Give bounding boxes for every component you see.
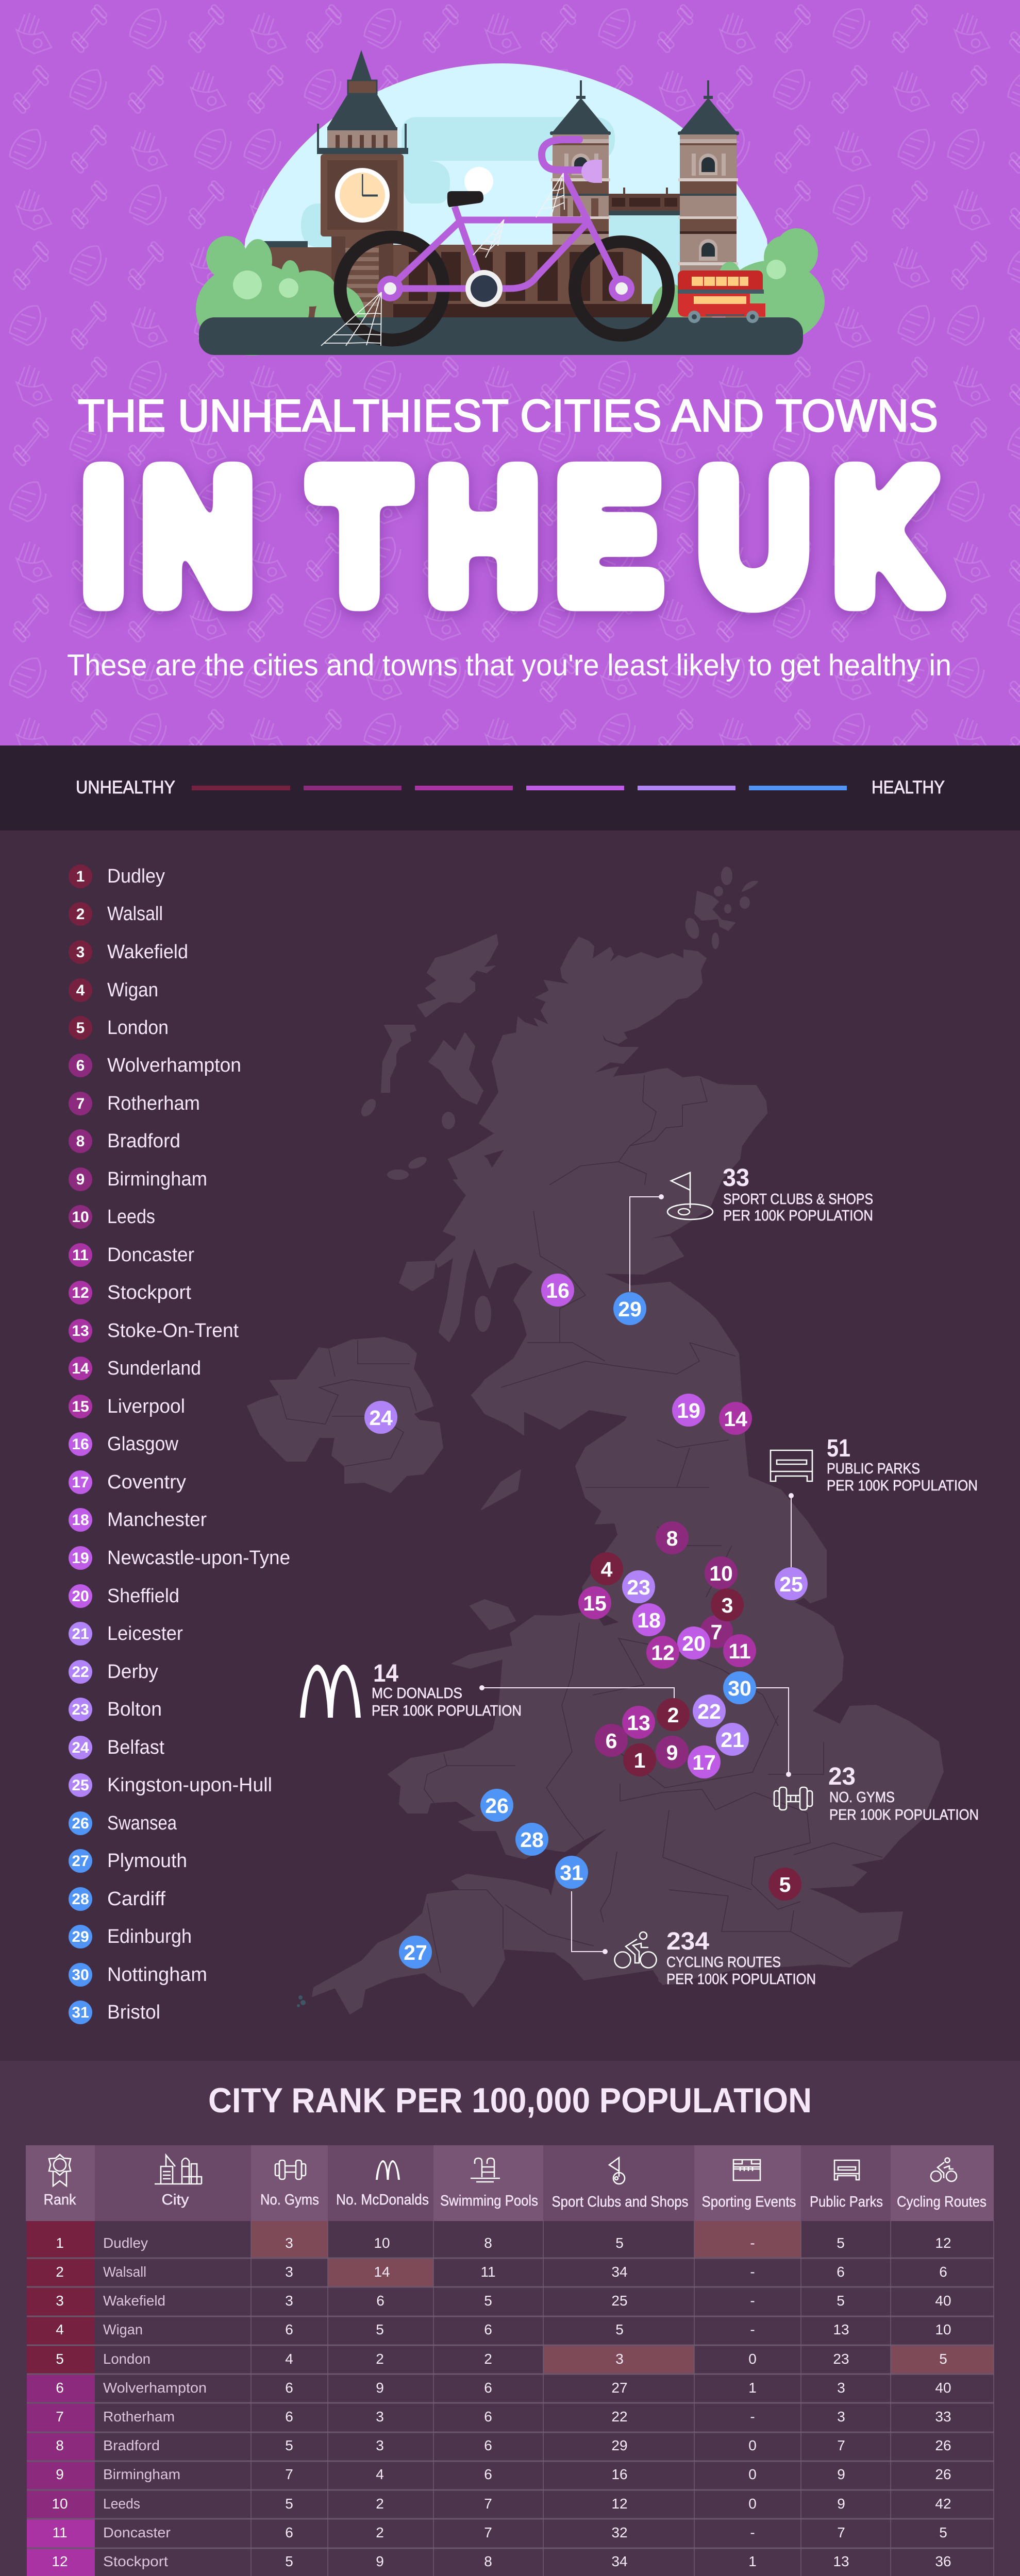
map markers: city ranks: 10 <box>709 1562 733 1585</box>
table rows: 4 <box>56 2321 64 2337</box>
table rows: 0 <box>748 2466 757 2482</box>
table rows: 11 <box>480 2264 496 2280</box>
table header <box>26 2145 994 2221</box>
list: ranked cities: 7 <box>76 1095 85 1112</box>
list: ranked cities: Bradford <box>107 1130 180 1152</box>
list: ranked cities: Stockport <box>107 1282 191 1303</box>
table rows: London <box>103 2351 151 2367</box>
title: the unhealthiest cities and towns: THE UNHEALTHIEST CITIES AND TOWNS <box>78 390 938 441</box>
table rows: Birmingham <box>103 2466 180 2482</box>
table rows: 2 <box>376 2524 384 2540</box>
header icon: cyclist <box>931 2158 957 2181</box>
table rows: 26 <box>935 2466 951 2482</box>
table header: City <box>162 2192 189 2208</box>
map markers: city ranks: 7 <box>711 1620 722 1644</box>
list: ranked cities: Derby <box>107 1661 158 1683</box>
table rows: 6 <box>285 2321 293 2337</box>
table rows: 3 <box>285 2293 293 2309</box>
table header: Rank <box>43 2192 76 2208</box>
table rows: 8 <box>484 2235 492 2251</box>
table rows: Walsall <box>103 2264 146 2280</box>
table rows: 26 <box>935 2437 951 2453</box>
table rows: 3 <box>376 2437 384 2453</box>
table rows: Doncaster <box>103 2524 171 2540</box>
list: ranked cities: 15 <box>72 1398 89 1415</box>
table rows: 40 <box>935 2293 951 2309</box>
list: ranked cities: Swansea <box>107 1812 177 1834</box>
list: ranked cities: Nottingham <box>107 1964 207 1986</box>
table rows: 6 <box>285 2380 293 2396</box>
table rows: - <box>750 2293 755 2309</box>
map markers: city ranks: 1 <box>634 1749 645 1772</box>
map: United Kingdom and Ireland <box>247 867 943 2014</box>
list: ranked cities: 28 <box>72 1891 89 1908</box>
list: ranked cities: Rotherham <box>107 1093 200 1114</box>
table rows: 6 <box>484 2321 492 2337</box>
table rows: 3 <box>837 2409 845 2425</box>
list: ranked cities: London <box>107 1017 169 1039</box>
map markers: city ranks: 5 <box>779 1873 791 1896</box>
table rows: 7 <box>837 2524 845 2540</box>
header icon: city skyline <box>155 2155 202 2184</box>
table rows: 6 <box>837 2264 845 2280</box>
spider webs <box>321 173 564 346</box>
list: ranked cities: 31 <box>72 2004 89 2021</box>
list: ranked cities: 26 <box>72 1815 89 1832</box>
list: ranked cities: Doncaster <box>107 1244 194 1266</box>
header icon: swimming pool <box>471 2158 500 2182</box>
header icon: rank badge <box>49 2155 71 2186</box>
road <box>199 317 803 355</box>
map markers: city ranks: 18 <box>637 1608 661 1632</box>
table rows: 10 <box>374 2235 390 2251</box>
map markers: city ranks: 14 <box>724 1407 747 1431</box>
list: ranked cities: Kingston-upon-Hull <box>107 1774 272 1796</box>
panel: legend band: HEALTHY <box>872 777 945 798</box>
map markers: city ranks: 11 <box>728 1639 751 1663</box>
table rows: Dudley <box>103 2235 148 2251</box>
table rows: 9 <box>376 2553 384 2569</box>
table rows: 7 <box>484 2496 492 2512</box>
list: ranked cities: Cardiff <box>107 1888 165 1910</box>
table rows: 5 <box>285 2496 293 2512</box>
parliament <box>393 245 653 317</box>
panel: legend band: UNHEALTHY <box>76 777 175 798</box>
list: ranked cities: Edinburgh <box>107 1926 192 1947</box>
table rows: 22 <box>611 2409 628 2425</box>
list: ranked cities: 14 <box>72 1360 89 1377</box>
table rows: 34 <box>611 2264 628 2280</box>
table rows: Bradford <box>103 2437 160 2453</box>
list: ranked cities: 20 <box>72 1588 89 1605</box>
table rows: 32 <box>611 2524 628 2540</box>
list: ranked cities: 1 <box>76 868 85 885</box>
list: ranked cities: 9 <box>76 1171 85 1188</box>
table rows: 2 <box>56 2264 64 2280</box>
table header: Sport Clubs and Shops <box>551 2194 689 2210</box>
table rows: 3 <box>837 2380 845 2396</box>
callout: sport clubs and shops: SPORT CLUBS & SHOPS <box>723 1191 873 1208</box>
callout: cycling routes: 234 <box>666 1928 709 1955</box>
table rows: 5 <box>56 2351 64 2367</box>
callout: sport clubs and shops: 33 <box>723 1164 749 1192</box>
table rows: 5 <box>939 2524 947 2540</box>
list: ranked cities: Leicester <box>107 1623 183 1645</box>
map markers: city ranks: 9 <box>666 1741 678 1765</box>
callout: no. gyms: 23 <box>828 1763 856 1790</box>
table rows: 5 <box>837 2293 845 2309</box>
table rows: 13 <box>833 2553 849 2569</box>
list: ranked cities: 27 <box>72 1853 89 1870</box>
table rows: 6 <box>285 2524 293 2540</box>
panel: purple header <box>0 0 1020 745</box>
map markers: city ranks: 6 <box>606 1729 617 1753</box>
table rows: 2 <box>376 2351 384 2367</box>
list: ranked cities: Wigan <box>107 979 158 1001</box>
map markers: city ranks: 31 <box>560 1861 583 1885</box>
table rows: 10 <box>935 2321 951 2337</box>
table rows: 9 <box>837 2466 845 2482</box>
table rows: 3 <box>285 2235 293 2251</box>
table rows: - <box>750 2235 755 2251</box>
table rows: Rotherham <box>103 2409 175 2425</box>
table rows: 6 <box>285 2409 293 2425</box>
list: ranked cities: 29 <box>72 1928 89 1945</box>
header icon: golf <box>609 2158 625 2184</box>
table rows: 25 <box>611 2293 628 2309</box>
callout: sport clubs and shops: PER 100K POPULATION <box>723 1208 873 1224</box>
table rows: 27 <box>611 2380 628 2396</box>
table rows: 7 <box>56 2409 64 2425</box>
list: ranked cities: Manchester <box>107 1509 207 1531</box>
callout: public parks: PUBLIC PARKS <box>827 1461 920 1477</box>
list: ranked cities: Newcastle-upon-Tyne <box>107 1547 290 1569</box>
bicycle <box>340 140 668 340</box>
map markers: city ranks: 16 <box>546 1279 570 1302</box>
header icon: bench <box>834 2160 859 2180</box>
list: ranked cities: 30 <box>72 1967 89 1984</box>
list: ranked cities: 24 <box>72 1739 89 1756</box>
panel: legend band <box>0 745 1020 831</box>
table rows: - <box>750 2524 755 2540</box>
table header: Sporting Events <box>702 2194 796 2210</box>
table header: No. Gyms <box>260 2192 319 2208</box>
table rows: - <box>750 2409 755 2425</box>
list: ranked cities: Leeds <box>107 1206 155 1228</box>
table rows: 5 <box>285 2437 293 2453</box>
list: ranked cities: Liverpool <box>107 1396 185 1417</box>
table rows: 3 <box>376 2409 384 2425</box>
list: ranked cities: Wakefield <box>107 941 188 963</box>
callout: mc donalds: MC DONALDS <box>372 1685 462 1702</box>
header icon: mcdonalds <box>376 2160 400 2180</box>
list: ranked cities: 4 <box>76 982 85 999</box>
table rows: 9 <box>837 2496 845 2512</box>
map markers: city ranks: 28 <box>520 1828 544 1852</box>
table rows: 6 <box>484 2380 492 2396</box>
table rows: 13 <box>833 2321 849 2337</box>
map markers: city ranks: 29 <box>618 1297 642 1321</box>
list: ranked cities: 16 <box>72 1436 89 1453</box>
table: rank colour column <box>27 2221 95 2576</box>
list: ranked cities: 11 <box>72 1247 89 1264</box>
list: ranked cities: 6 <box>76 1057 85 1074</box>
callout: cycling routes: CYCLING ROUTES <box>666 1954 781 1971</box>
callout: no. gyms: PER 100K POPULATION <box>829 1807 979 1823</box>
red bus <box>678 270 765 323</box>
table rows: 5 <box>376 2321 384 2337</box>
list: ranked cities: 3 <box>76 944 85 961</box>
table rows: 8 <box>484 2553 492 2569</box>
map markers: city ranks: 30 <box>728 1676 751 1700</box>
callout: no. gyms: NO. GYMS <box>829 1789 895 1806</box>
callout: public parks: 51 <box>827 1435 850 1462</box>
table rows: Wolverhampton <box>103 2380 207 2396</box>
table rows: 5 <box>484 2293 492 2309</box>
table rows: 3 <box>285 2264 293 2280</box>
table rows: 7 <box>484 2524 492 2540</box>
table rows: 6 <box>484 2466 492 2482</box>
table rows: 9 <box>56 2466 64 2482</box>
table rows: 29 <box>611 2437 628 2453</box>
table rows: 12 <box>935 2235 951 2251</box>
table header: Cycling Routes <box>897 2194 986 2210</box>
map markers: city ranks: 20 <box>682 1632 706 1655</box>
table rows: 1 <box>56 2235 64 2251</box>
list: ranked cities: 5 <box>76 1020 85 1037</box>
map markers: city ranks: 27 <box>404 1941 427 1964</box>
callout: mc donalds: PER 100K POPULATION <box>372 1703 522 1719</box>
table rows: 16 <box>611 2466 628 2482</box>
table rows: - <box>750 2264 755 2280</box>
map markers: city ranks: 17 <box>692 1751 716 1774</box>
table rows: 7 <box>837 2437 845 2453</box>
list: ranked cities: 17 <box>72 1474 89 1491</box>
map markers: city ranks: 21 <box>721 1728 744 1752</box>
list: ranked cities: 2 <box>76 906 85 923</box>
map markers: city ranks: 22 <box>697 1700 721 1723</box>
map markers: city ranks: 4 <box>601 1557 613 1581</box>
table rows: 0 <box>748 2496 757 2512</box>
map markers: city ranks: 19 <box>677 1399 700 1422</box>
panel: map background <box>0 831 1020 2061</box>
list: ranked cities: 19 <box>72 1550 89 1567</box>
table rows: 0 <box>748 2351 757 2367</box>
connector lines from map markers to callouts <box>482 1197 791 1952</box>
illustration: London skyline with abandoned bike <box>196 50 825 355</box>
header icon: gym <box>275 2160 306 2179</box>
callout: cycling routes <box>614 1928 816 1988</box>
map markers: city ranks: 25 <box>779 1572 803 1596</box>
table header: Public Parks <box>810 2194 883 2210</box>
table rows: 12 <box>611 2496 628 2512</box>
table rows: 4 <box>285 2351 293 2367</box>
list: ranked cities: Coventry <box>107 1471 186 1493</box>
table rows: 10 <box>52 2496 68 2512</box>
table rows: Wigan <box>103 2321 143 2337</box>
subtitle: These are the cities and towns that you're least likely to get healthy in <box>67 649 951 682</box>
title: in the uk: IN THE UK <box>83 440 935 633</box>
table rows: 5 <box>939 2351 947 2367</box>
map markers: city ranks: 24 <box>369 1406 393 1430</box>
map markers: city ranks: 3 <box>722 1594 733 1617</box>
table rows: Leeds <box>103 2496 140 2512</box>
tower bridge <box>550 80 739 274</box>
table rows: 3 <box>615 2351 624 2367</box>
callout: mc donalds <box>300 1660 522 1719</box>
list: ranked cities: 21 <box>72 1625 89 1642</box>
table rows: 6 <box>484 2437 492 2453</box>
map markers: city ranks: 12 <box>651 1641 675 1665</box>
table rows: 2 <box>484 2351 492 2367</box>
table rows: 8 <box>56 2437 64 2453</box>
callout: public parks: PER 100K POPULATION <box>827 1478 978 1494</box>
table rows: 40 <box>935 2380 951 2396</box>
table rows: 3 <box>56 2293 64 2309</box>
list: ranked cities: 10 <box>72 1209 89 1226</box>
list: ranked cities: Plymouth <box>107 1850 187 1872</box>
callout: cycling routes: PER 100K POPULATION <box>666 1971 816 1988</box>
table rows <box>52 2235 955 2576</box>
list: ranked cities: 23 <box>72 1701 89 1718</box>
panel: table section background <box>0 2061 1020 2576</box>
table header: Swimming Pools <box>440 2193 538 2209</box>
table rows: 5 <box>615 2321 624 2337</box>
callout: public parks <box>771 1435 978 1494</box>
table rows: 9 <box>376 2380 384 2396</box>
list: ranked cities: Wolverhampton <box>107 1055 241 1076</box>
list: ranked cities: 13 <box>72 1323 89 1340</box>
list: ranked cities: Glasgow <box>107 1433 179 1455</box>
table rows: 33 <box>935 2409 951 2425</box>
heading: city rank per 100,000 population: CITY RANK PER 100,000 POPULATION <box>208 2081 812 2120</box>
table rows: 2 <box>376 2496 384 2512</box>
map markers: city ranks: 23 <box>627 1575 650 1599</box>
callout: sport clubs and shops <box>667 1164 873 1224</box>
list: ranked cities: 12 <box>72 1284 89 1301</box>
map markers: city ranks: 15 <box>583 1591 607 1615</box>
table rows: Stockport <box>103 2553 168 2569</box>
table rows: 6 <box>56 2380 64 2396</box>
table rows: 6 <box>484 2409 492 2425</box>
table rows: 11 <box>52 2524 68 2540</box>
list: ranked cities: Birmingham <box>107 1168 207 1190</box>
big ben <box>317 50 408 317</box>
list: ranked cities: Sheffield <box>107 1585 179 1607</box>
list: ranked cities: Belfast <box>107 1737 164 1758</box>
table rows: 4 <box>376 2466 384 2482</box>
bushes <box>196 228 825 355</box>
table rows: Wakefield <box>103 2293 165 2309</box>
list: ranked cities: Dudley <box>107 866 165 887</box>
callout: no. gyms <box>774 1763 979 1823</box>
list: ranked cities: 8 <box>76 1133 85 1150</box>
map markers: city ranks: 26 <box>485 1794 509 1818</box>
list: ranked cities: Sunderland <box>107 1358 201 1379</box>
table: highlighted lowest cells <box>251 2221 994 2576</box>
callout: mc donalds: 14 <box>373 1660 398 1687</box>
connector end dots <box>479 1194 794 1954</box>
table rows: 1 <box>748 2380 757 2396</box>
table rows: 1 <box>748 2553 757 2569</box>
list: ranked cities: 22 <box>72 1664 89 1681</box>
table rows: 5 <box>285 2553 293 2569</box>
table rows: 42 <box>935 2496 951 2512</box>
table grid <box>27 2221 994 2576</box>
map markers: city ranks: 13 <box>627 1711 650 1735</box>
list: ranked cities <box>69 865 290 2024</box>
list: ranked cities: Bolton <box>107 1699 162 1720</box>
header icon: sporting events <box>733 2160 760 2180</box>
table rows: 5 <box>837 2235 845 2251</box>
table rows: 6 <box>376 2293 384 2309</box>
map markers: city ranks: 8 <box>666 1527 678 1550</box>
list: ranked cities: Stoke-On-Trent <box>107 1320 239 1342</box>
table rows: 0 <box>748 2437 757 2453</box>
map markers: city ranks <box>364 1274 808 1969</box>
list: ranked cities: Walsall <box>107 903 163 925</box>
table rows: 7 <box>285 2466 293 2482</box>
map markers: city ranks: 2 <box>667 1703 679 1727</box>
table rows: 34 <box>611 2553 628 2569</box>
table rows: 23 <box>833 2351 849 2367</box>
list: ranked cities: 18 <box>72 1512 89 1529</box>
table rows: 36 <box>935 2553 951 2569</box>
table rows: 5 <box>615 2235 624 2251</box>
table rows: - <box>750 2321 755 2337</box>
list: ranked cities: Bristol <box>107 2002 160 2023</box>
table rows: 6 <box>939 2264 947 2280</box>
list: ranked cities: 25 <box>72 1777 89 1794</box>
table rows: 12 <box>52 2553 68 2569</box>
table header: No. McDonalds <box>336 2192 429 2208</box>
table rows: 14 <box>374 2264 390 2280</box>
